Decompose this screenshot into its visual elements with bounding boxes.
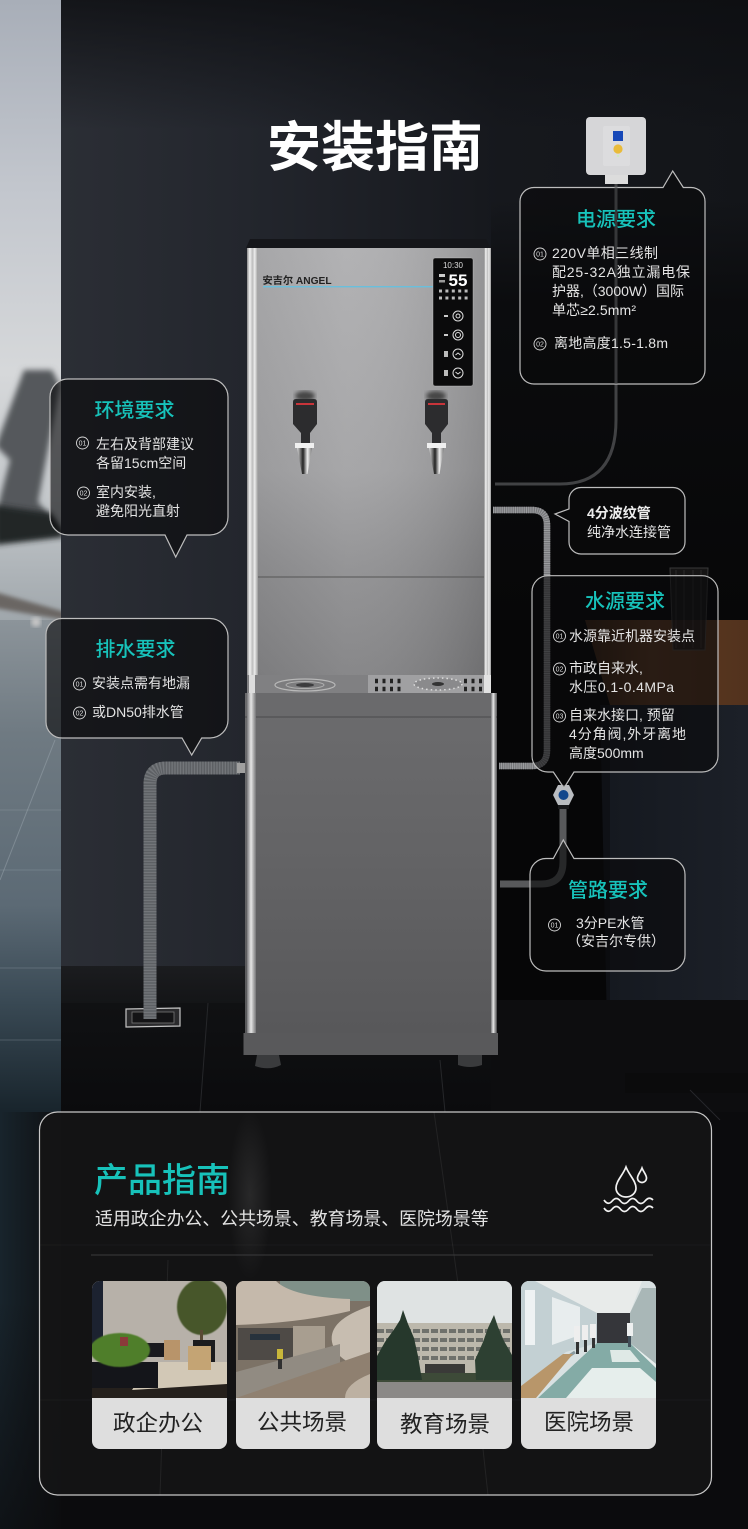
lower steel body	[245, 693, 497, 1033]
callout: water source requirements: 水源靠近机器安装点	[569, 628, 695, 644]
callout: corrugated hose: 纯净水连接管	[587, 524, 671, 540]
PE water pipe	[500, 802, 563, 884]
callout: environment requirements: 各留15cm空间	[96, 455, 186, 471]
callout: water source requirements	[532, 576, 718, 788]
callout: drainage requirements: 安装点需有地漏	[92, 675, 190, 691]
photo: office lobby	[90, 1279, 227, 1398]
label: 公共场景	[257, 1410, 347, 1435]
callout: environment requirements: 01	[79, 440, 86, 448]
upper steel body	[247, 248, 491, 693]
logo: 安吉尔 ANGEL	[262, 274, 332, 287]
callout: water source requirements: 自来水接口, 预留	[569, 707, 675, 723]
water dispenser machine	[244, 239, 498, 1068]
callout: power requirements: 护器,（3000W）国际	[552, 283, 684, 299]
callout: environment requirements	[50, 379, 228, 557]
card: government office	[90, 1279, 227, 1449]
callout: power requirements: 电源要求	[576, 208, 656, 231]
photo: shopping mall atrium	[236, 1281, 370, 1398]
callout: piping requirements: 01	[551, 922, 558, 930]
callout: environment requirements: 左右及背部建议	[96, 436, 194, 452]
control display: 10:30	[443, 261, 464, 270]
corrugated drain hose and floor drain	[126, 763, 245, 1027]
callout: drainage requirements: 排水要求	[96, 638, 176, 661]
corrugated pure water hose	[493, 510, 547, 766]
callout: water source requirements: 水源要求	[585, 590, 665, 613]
callout: drainage requirements: 01	[76, 682, 83, 688]
left faucet	[293, 391, 317, 474]
power cable from socket	[495, 184, 616, 484]
callout: piping requirements: 管路要求	[568, 879, 648, 902]
subtitle: 适用政企办公、公共场景、教育场景、医院场景等	[95, 1209, 489, 1229]
card: hospital	[521, 1281, 656, 1449]
label: 政企办公	[113, 1411, 203, 1436]
card: public places	[236, 1281, 370, 1449]
callout: corrugated hose	[555, 488, 685, 554]
callout: piping requirements: （安吉尔专供）	[567, 933, 665, 949]
callout: piping requirements: 3分PE水管	[576, 915, 644, 931]
callout: water source requirements: 01	[556, 634, 563, 640]
callout: environment requirements: 避免阳光直射	[96, 503, 180, 519]
callout: water source requirements: 市政自来水,	[569, 660, 643, 676]
label: 医院场景	[544, 1410, 634, 1435]
callout: environment requirements: 02	[80, 490, 87, 498]
control display: 55	[449, 271, 467, 290]
machine base	[244, 1033, 498, 1055]
callout: drainage requirements: 02	[76, 710, 83, 718]
callout: power requirements: 220V单相三线制	[552, 245, 658, 261]
heading: 产品指南	[94, 1162, 230, 1200]
panel: product guide	[40, 1110, 712, 1495]
callout: piping requirements	[530, 840, 685, 971]
callout: power requirements	[520, 171, 705, 384]
callout: water source requirements: 高度500mm	[569, 745, 644, 761]
machine side edge highlights	[247, 248, 491, 678]
callout: power requirements: 配25-32A独立漏电保	[552, 264, 690, 280]
callout: drainage requirements	[46, 618, 228, 755]
title: 安装指南	[267, 118, 483, 178]
card: education	[377, 1281, 512, 1449]
callout: water source requirements: 02	[556, 666, 563, 674]
callout: water source requirements: 4分角阀,外牙离地	[569, 726, 686, 742]
drip tray	[247, 675, 491, 693]
callout: power requirements: 离地高度1.5-1.8m	[554, 335, 668, 351]
callout: environment requirements: 环境要求	[94, 399, 174, 422]
icon: water drops and waves	[604, 1167, 653, 1212]
label: 教育场景	[400, 1412, 490, 1437]
callout: environment requirements: 室内安装,	[96, 484, 156, 500]
callout: corrugated hose: 4分波纹管	[587, 505, 651, 521]
callout: power requirements: 单芯≥2.5mm²	[552, 302, 636, 318]
wall socket	[586, 117, 646, 184]
water valve	[553, 785, 574, 809]
callout: water source requirements: 水压0.1-0.4MPa	[569, 679, 674, 695]
panel floor reflections	[40, 1110, 710, 1495]
drinking glass on wooden table	[670, 568, 708, 650]
control display	[433, 258, 473, 386]
right faucet	[425, 391, 448, 474]
photo: hospital corridor	[521, 1281, 656, 1398]
callout: drainage requirements: 或DN50排水管	[92, 704, 184, 720]
callout: water source requirements: 03	[556, 714, 563, 720]
machine top cap	[246, 239, 491, 248]
callout: power requirements: 01	[536, 252, 544, 258]
callout: power requirements: 02	[536, 342, 544, 348]
photo: school building	[377, 1281, 512, 1398]
machine feet	[255, 1055, 482, 1068]
